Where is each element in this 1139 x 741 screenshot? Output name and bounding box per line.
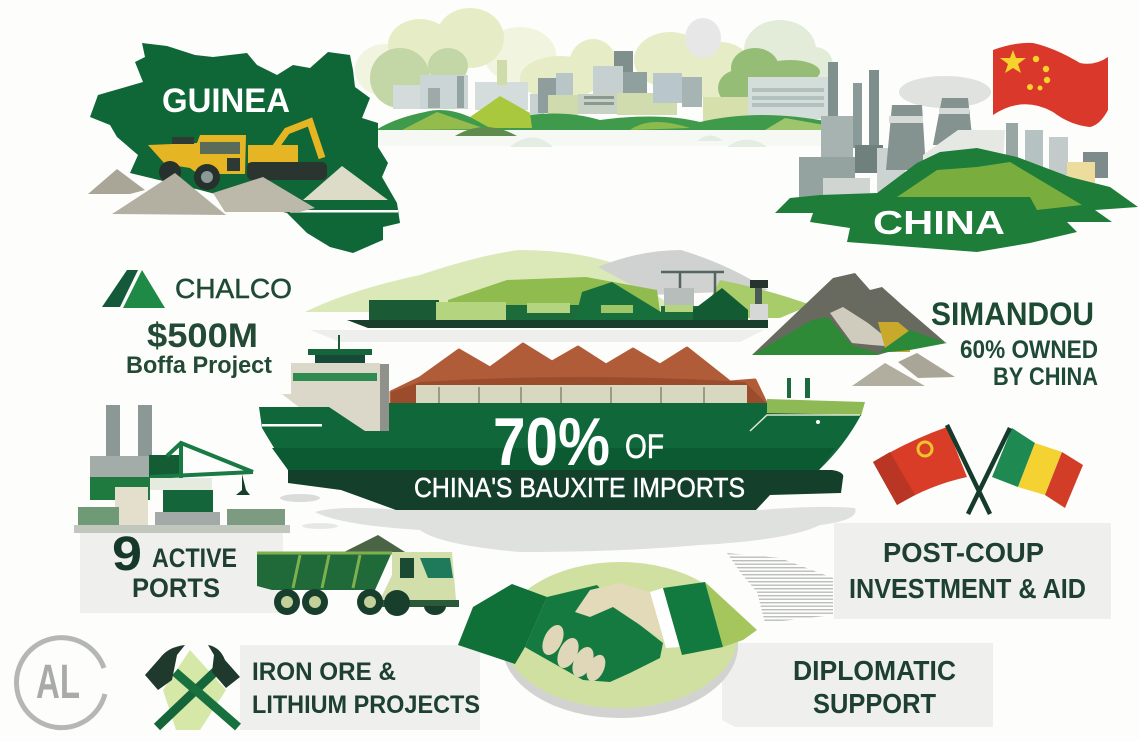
panel: post-coup investment and aid: INVESTMENT & AID — [849, 573, 1086, 604]
heading: China: CHINA — [873, 204, 1005, 241]
panel: diplomatic support — [722, 643, 993, 727]
heading: Guinea: GUINEA — [162, 82, 290, 120]
panel: diplomatic support: SUPPORT — [813, 688, 936, 719]
icon: mineral piles — [88, 166, 388, 215]
illustration: Simandou mountain — [752, 273, 955, 386]
panel: Guinea map — [88, 43, 400, 253]
icon: yellow dump truck — [148, 135, 246, 190]
illustration: rail and processing plant — [305, 250, 811, 342]
panel: 9 active ports: 9 — [112, 528, 142, 581]
illustration: city skyline with trees — [355, 8, 833, 147]
icon: excavator — [247, 122, 327, 180]
panel: 9 active ports: ACTIVE — [152, 543, 237, 573]
text: Simandou — [931, 296, 1098, 391]
icon: crossed flags — [873, 425, 1083, 514]
icon: green dump truck — [257, 535, 459, 616]
icon: factories and power plant — [799, 62, 1108, 205]
panel: iron ore and lithium projects: LITHIUM PROJECTS — [252, 691, 480, 719]
illustration: hatched shadow — [727, 553, 833, 623]
text: $500M Boffa Project: $500M — [147, 317, 258, 355]
text: Simandou: 60% OWNED — [960, 336, 1098, 364]
illustration: green hill — [775, 148, 1138, 252]
text: Simandou: BY CHINA — [993, 363, 1098, 391]
text: Simandou: SIMANDOU — [931, 296, 1094, 332]
panel: post-coup investment and aid: POST-COUP — [883, 537, 1044, 568]
panel: post-coup investment and aid — [834, 523, 1111, 619]
text: China's bauxite imports: CHINA'S BAUXITE IMPORTS — [414, 472, 745, 503]
heading: 70% of: 70% — [493, 404, 610, 480]
illustration: cargo ship — [259, 335, 865, 510]
panel: 9 active ports: PORTS — [132, 573, 220, 603]
illustration: water ripples — [280, 494, 856, 552]
icon: Chalco logo — [102, 270, 165, 308]
heading: 70% of: OF — [625, 428, 664, 466]
icon: crossed hammers — [145, 645, 240, 730]
panel: iron ore and lithium projects: IRON ORE & — [252, 658, 396, 686]
icon: China flag — [993, 43, 1108, 127]
panel: diplomatic support: DIPLOMATIC — [793, 655, 956, 686]
illustration: port with crane — [74, 405, 290, 533]
panel: iron ore and lithium projects — [145, 645, 480, 730]
logo: AL — [16, 638, 105, 728]
text: $500M Boffa Project — [126, 317, 272, 379]
panel: 9 active ports — [80, 528, 283, 613]
panel: China — [775, 43, 1138, 252]
icon: handshake — [458, 562, 757, 718]
text: Chalco: CHALCO — [175, 273, 292, 304]
text: $500M Boffa Project: Boffa Project — [126, 352, 272, 379]
logo: AL: AL — [36, 656, 80, 709]
